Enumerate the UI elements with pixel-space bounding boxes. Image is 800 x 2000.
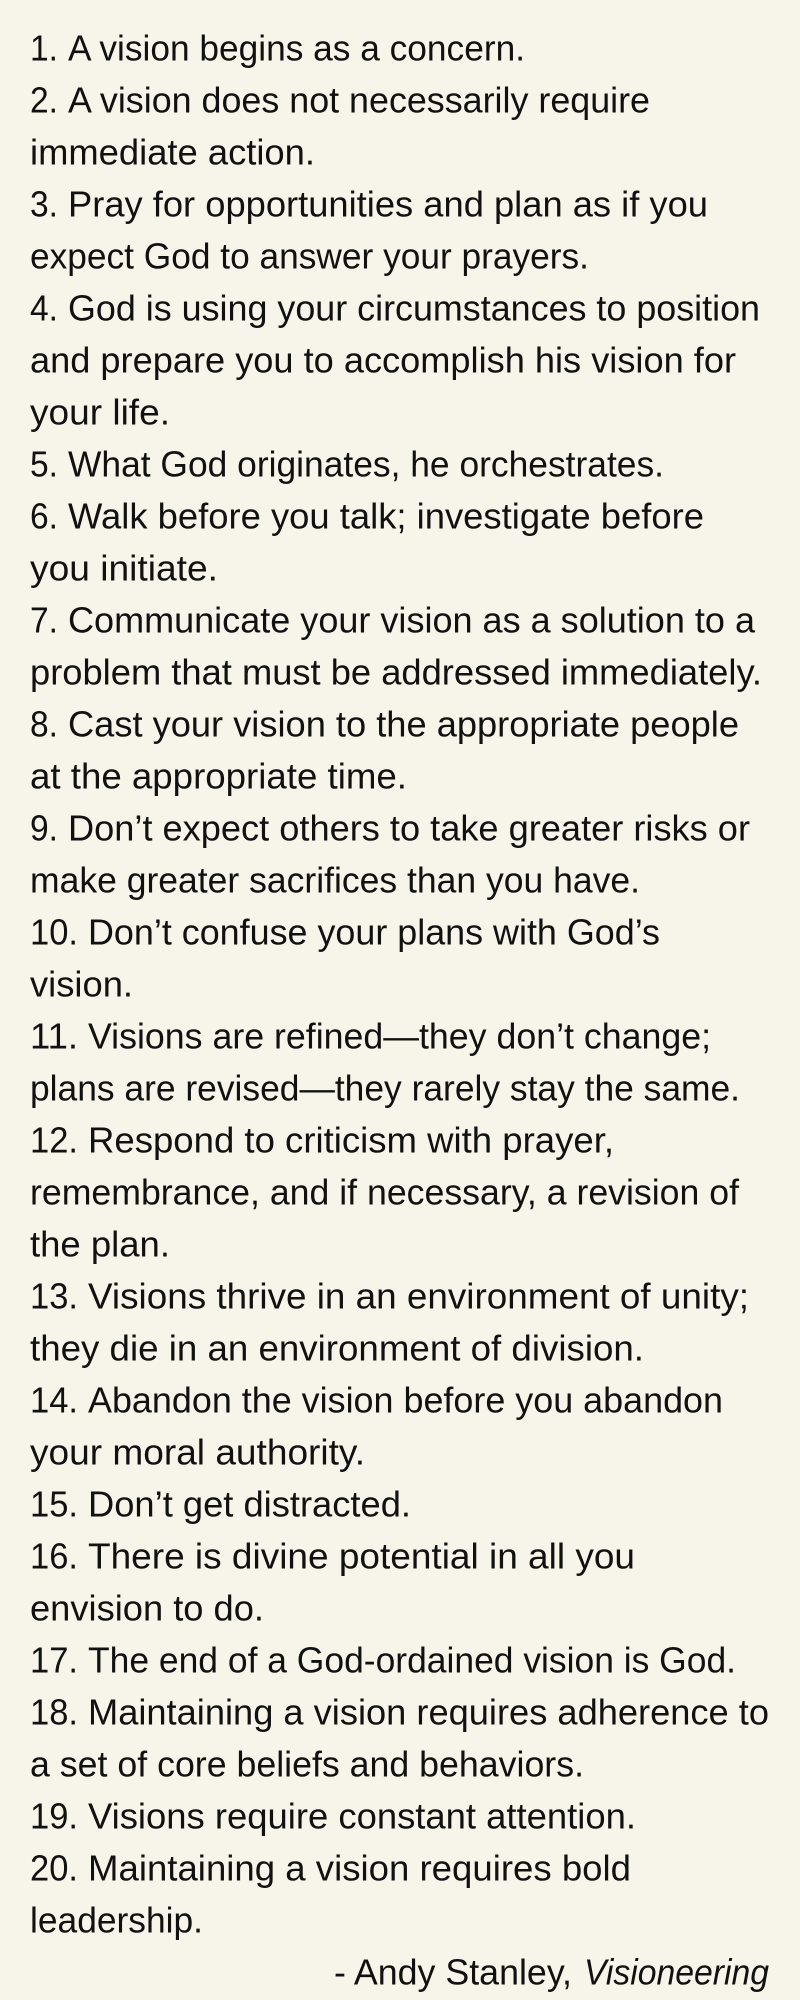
point 9: 9. (30, 808, 58, 848)
point 19: 19. (30, 1796, 78, 1836)
point 9: make greater sacrifices than you have. (30, 860, 640, 900)
point 12: 12. (30, 1120, 78, 1160)
point 12: remembrance, and if necessary, a revision of (30, 1172, 740, 1212)
point 20: Maintaining a vision requires bold (88, 1848, 631, 1888)
point 4: God is using your circumstances to position (68, 288, 760, 328)
point 8: 8. (30, 704, 58, 744)
point 2: immediate action. (30, 132, 315, 172)
point 16: There is divine potential in all you (88, 1536, 635, 1576)
point 16: 16. (30, 1536, 78, 1576)
point 14: Abandon the vision before you abandon (88, 1380, 723, 1420)
point 20 (30, 1848, 631, 1940)
point 3: expect God to answer your prayers. (30, 236, 589, 276)
point 17: The end of a God-ordained vision is God. (88, 1640, 736, 1680)
point 4: your life. (30, 392, 170, 432)
point 7 (30, 600, 762, 692)
attribution (334, 1952, 769, 1992)
point 3: 3. (30, 184, 58, 224)
point 2: A vision does not necessarily require (68, 80, 650, 120)
point 11: plans are revised—they rarely stay the same. (30, 1068, 740, 1108)
point 14: your moral authority. (30, 1432, 365, 1472)
point 7: problem that must be addressed immediately. (30, 652, 762, 692)
point 6: 6. (30, 496, 58, 536)
point 13: Visions thrive in an environment of unity; (88, 1276, 749, 1316)
point 12: the plan. (30, 1224, 170, 1264)
point 18: Maintaining a vision requires adherence to (88, 1692, 769, 1732)
point 14: 14. (30, 1380, 78, 1420)
point 13: they die in an environment of division. (30, 1328, 644, 1368)
point 7: 7. (30, 600, 58, 640)
point 12 (30, 1120, 740, 1264)
point 10: vision. (30, 964, 133, 1004)
point 4: and prepare you to accomplish his vision for (30, 340, 736, 380)
point 13: 13. (30, 1276, 78, 1316)
point 15: Don’t get distracted. (88, 1484, 411, 1524)
point 7: Communicate your vision as a solution to a (68, 600, 756, 640)
point 10: Don’t confuse your plans with God’s (88, 912, 660, 952)
point 2: 2. (30, 80, 58, 120)
point 8: Cast your vision to the appropriate people (68, 704, 739, 744)
point 6: you initiate. (30, 548, 218, 588)
point 1: A vision begins as a concern. (68, 28, 525, 68)
point 16: envision to do. (30, 1588, 264, 1628)
point 3 (30, 184, 708, 276)
point 10: 10. (30, 912, 78, 952)
point 8 (30, 704, 739, 796)
attribution: - Andy Stanley, (334, 1952, 572, 1992)
point 11: Visions are refined—they don’t change; (88, 1016, 711, 1056)
point 20: leadership. (30, 1900, 203, 1940)
point 4: 4. (30, 288, 58, 328)
point 14 (30, 1380, 723, 1472)
point 19: Visions require constant attention. (88, 1796, 636, 1836)
point 17: 17. (30, 1640, 78, 1680)
point 16 (30, 1536, 635, 1628)
point 11: 11. (30, 1016, 78, 1056)
point 15: 15. (30, 1484, 78, 1524)
point 3: Pray for opportunities and plan as if you (68, 184, 708, 224)
point 6: Walk before you talk; investigate before (68, 496, 704, 536)
point 18 (30, 1692, 769, 1784)
point 20: 20. (30, 1848, 78, 1888)
point 4 (30, 288, 760, 432)
point 18: 18. (30, 1692, 78, 1732)
attribution: Visioneering (584, 1952, 769, 1992)
point 6 (30, 496, 704, 588)
point 2 (30, 80, 650, 172)
point 11 (30, 1016, 740, 1108)
point 5: What God originates, he orchestrates. (68, 444, 664, 484)
point 9 (30, 808, 750, 900)
point 18: a set of core beliefs and behaviors. (30, 1744, 584, 1784)
point 9: Don’t expect others to take greater risks or (68, 808, 750, 848)
point 1: 1. (30, 28, 58, 68)
point 13 (30, 1276, 749, 1368)
point 8: at the appropriate time. (30, 756, 407, 796)
point 5: 5. (30, 444, 58, 484)
point 10 (30, 912, 660, 1004)
point 12: Respond to criticism with prayer, (88, 1120, 614, 1160)
